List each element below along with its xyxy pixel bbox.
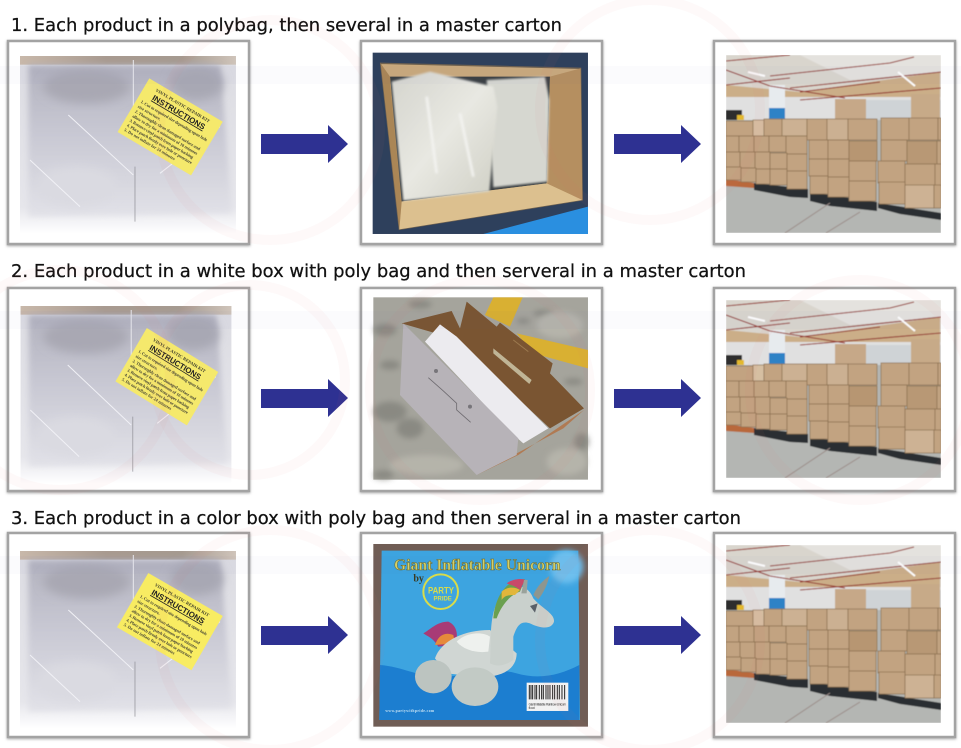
instruction label: size structure. — [136, 599, 161, 616]
instruction label: 4. Place patch firmly over hole or puncture — [126, 123, 193, 165]
arrow — [261, 616, 348, 654]
instruction label: 1. Cut to required size depending upon hole — [139, 594, 208, 636]
instruction label: 3. Remove vinyl patch from paper backing — [128, 613, 195, 654]
row 3 — [8, 509, 955, 737]
logo: PARTY — [428, 585, 455, 595]
frame: colour box photo: by — [413, 574, 424, 585]
frame: polybag photo — [8, 288, 249, 491]
instruction label: 5. Do not inflate for 24 minutes — [123, 127, 176, 161]
instruction label: 2. Thoroughly clean damaged surface and — [134, 604, 201, 646]
arrow — [614, 379, 701, 417]
instruction label — [117, 573, 223, 670]
instruction label: INSTRUCTIONS — [150, 588, 207, 626]
frame: white box photo — [361, 288, 602, 491]
barcode: float — [529, 706, 535, 710]
instruction label: 1. Cut to required size depending upon hole — [137, 349, 204, 393]
barcode — [527, 683, 568, 711]
arrow — [261, 379, 348, 417]
instruction label: 2. Thoroughly clean damaged surface and — [134, 109, 202, 152]
instruction label: 3. Remove vinyl patch from paper backing — [126, 367, 191, 410]
frame: polybag photo — [8, 41, 249, 244]
instruction label: 5. Do not inflate for 24 minutes — [121, 377, 173, 411]
arrow — [614, 125, 701, 163]
heading 3: 3. Each product in a color box with poly bag and then serveral in a master carton — [11, 509, 741, 529]
unicorn — [415, 576, 554, 706]
frame: pallets of cartons — [714, 288, 955, 491]
instruction label: VINYL PLASTIC REPAIR KIT — [155, 88, 211, 124]
instruction label: 4. Place patch firmly over hole or puncture — [126, 617, 193, 659]
instruction label: VINYL PLASTIC REPAIR KIT — [154, 582, 210, 618]
instruction label — [115, 328, 218, 425]
instruction label: 3. Remove vinyl patch from paper backing — [129, 118, 195, 160]
frame: polybag photo — [8, 533, 249, 737]
arrow — [614, 616, 701, 654]
frame: colour box photo — [361, 533, 602, 737]
barcode: Giant Inflatable Rainbow Unicorn — [529, 702, 566, 706]
frame: carton with polybags — [361, 41, 602, 244]
instruction label: allow to dry for a minimum of 10 minutes — [131, 113, 199, 156]
instruction label: INSTRUCTIONS — [148, 343, 203, 382]
instruction label: 2. Thoroughly clean damaged surface and — [132, 358, 198, 402]
box title: Giant Inflatable Unicorn — [394, 557, 561, 574]
instruction label: 4. Place patch firmly over hole or puncture — [124, 372, 189, 415]
logo: PRIDE — [434, 597, 452, 603]
website: www.partywithpride.com — [385, 709, 434, 713]
arrow — [261, 125, 348, 163]
frame: pallets of cartons — [714, 41, 955, 244]
heading 1: 1. Each product in a polybag, then several in a master carton — [11, 16, 562, 36]
frame: pallets of cartons — [714, 533, 955, 737]
instruction label: INSTRUCTIONS — [151, 93, 207, 132]
logo — [423, 574, 458, 609]
instruction label: 5. Do not inflate for 24 minutes — [123, 622, 176, 656]
instruction label: size structure. — [135, 353, 159, 371]
instruction label: size structure. — [137, 104, 162, 121]
instruction label — [118, 78, 223, 175]
instruction label: allow to dry for a minimum of 10 minutes — [131, 608, 199, 650]
instruction label: 1. Cut to required size depending upon hole — [140, 99, 209, 142]
row 2 — [8, 262, 955, 491]
heading 2: 2. Each product in a white box with poly bag and then serveral in a master carton — [11, 262, 746, 282]
instruction label: VINYL PLASTIC REPAIR KIT — [152, 337, 207, 374]
instruction label: allow to dry for a minimum of 10 minutes — [129, 363, 195, 406]
row 1 — [8, 16, 955, 244]
